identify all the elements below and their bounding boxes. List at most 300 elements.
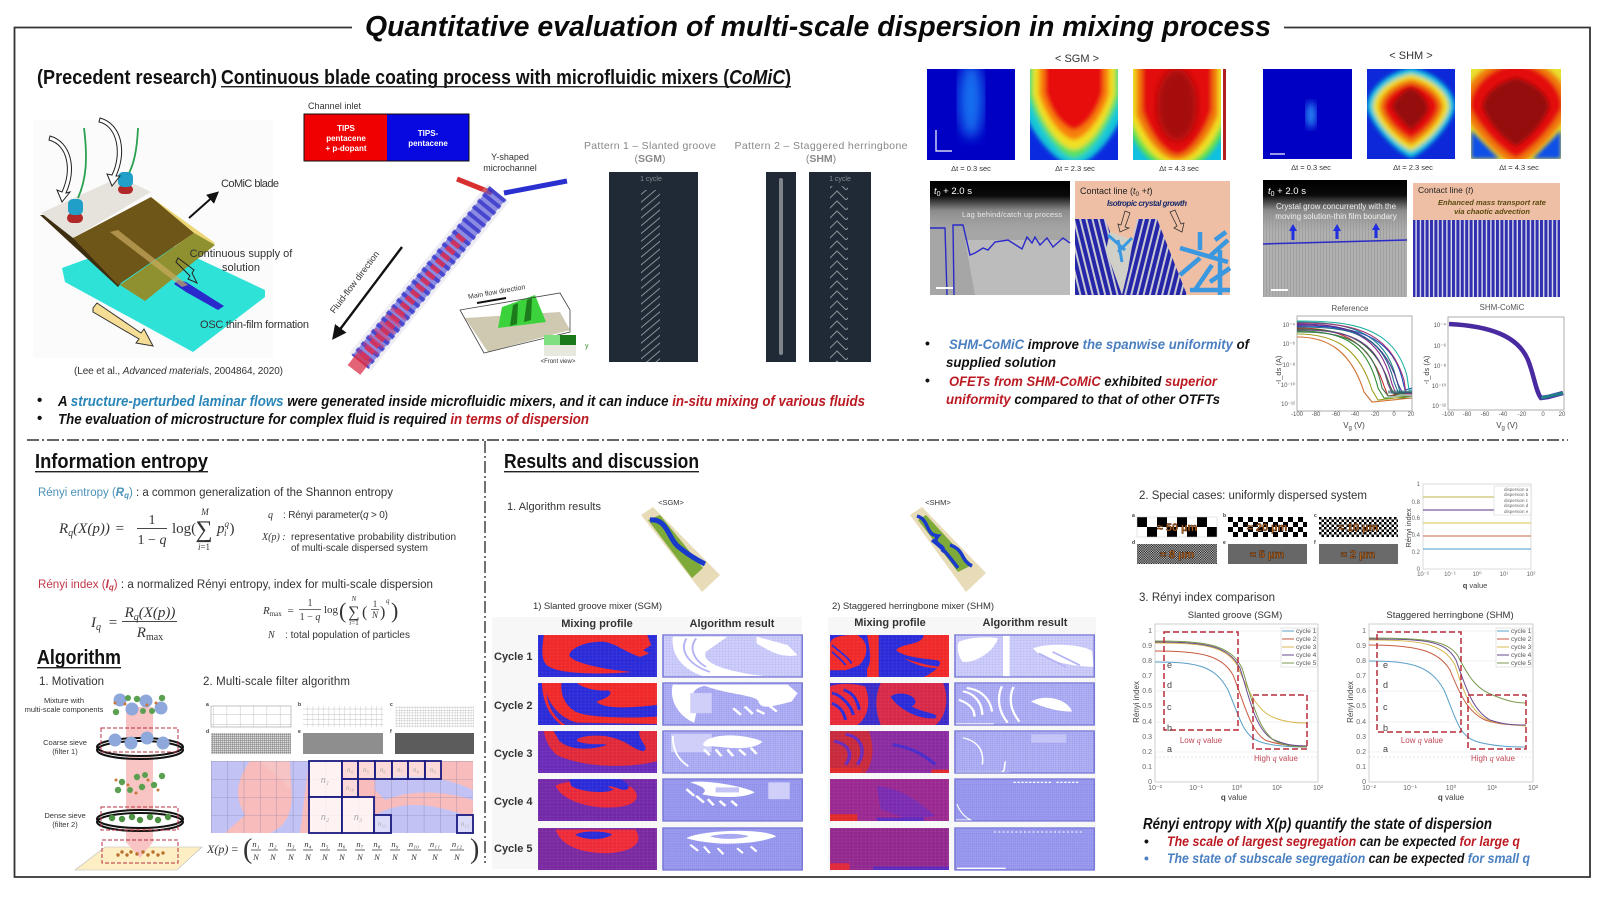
colorbar [1223,69,1226,160]
multi-scale grid with selected cells: n₉ [430,766,437,774]
heatmaps: SHM [1263,50,1570,172]
chart: SGM Renyi index: 10⁻² [1148,785,1163,792]
chart: SHM Renyi index: 0.2 [1356,749,1366,756]
key findings: left: A structure-perturbed laminar flows were generated inside microfluidic mixers, and it can induce in-situ mixing of various fluids [57,394,865,410]
parameter notes: q and X(p): representative probability distribution [291,532,456,543]
heading: algorithm: Algorithm [37,647,121,669]
patterns: (SHM) [806,153,836,165]
chart: SGM Renyi index: c [1167,702,1172,712]
algorithm result: SGM cycle 4 [663,779,802,821]
label: CoMiC blade: CoMiC blade [221,178,279,190]
chart: SHM Renyi index: 0.4 [1356,719,1366,726]
chart: SHM Renyi index: cycle 5 [1511,660,1532,667]
formula: Renyi index: R [125,605,134,621]
chart: uniform dispersion: 10⁻² [1417,572,1429,578]
heading: information entropy: Information entropy [35,451,209,473]
chart: reference transfer curves: 10⁻⁴ [1283,322,1295,329]
patterns: Pattern 2 – Staggered herringbone [734,140,908,152]
formula: X(p): N [338,852,346,862]
chart: reference transfer curves: -20 [1371,412,1380,418]
chart: reference transfer curves: 20 [1408,412,1415,418]
SEM: SGM: + 2.0 s [941,186,972,197]
heading: precedent research: (Precedent research) [37,67,217,89]
conclusion: Rényi entropy with X(p) quantify the state of dispersion [1143,816,1492,833]
table: slanted groove mixer [492,601,802,870]
time labels: SHM: Δt = 0.3 sec [1291,163,1331,172]
chart: SHM Renyi index: 10⁻² [1362,785,1377,792]
diagram: sieving motivation [25,694,202,870]
inset: groove box [460,284,589,365]
checkerboards: ≈ 5 µm [1250,549,1284,561]
definition: Renyi index: ) [114,579,118,591]
diagram: isotropic growth [1075,181,1230,295]
formula: Renyi index: = [105,615,117,631]
formula: X(p) [206,834,479,865]
checkerboards: ≈ 50 µm [1157,522,1197,534]
parameter notes: q and X(p): : Rényi parameter(q > 0) [283,510,388,521]
chart: SGM Renyi index: Low q value [1180,736,1222,745]
formula: X(p): X(p) = [206,842,238,856]
chart: SHM Renyi index: 0.1 [1356,764,1366,771]
formula: Renyi index: q [134,612,139,623]
chart: SHM Renyi index: e [1383,660,1388,670]
arrow: fluid-flow direction [335,247,402,336]
definition: Renyi index: : a normalized Rényi entropy, index for multi-scale dispersion [121,579,431,591]
mixing profile: SGM cycle 3 [538,731,657,773]
time labels: SGM: Δt = 0.3 sec [951,164,991,173]
chart: SGM Renyi index: High q value [1254,754,1298,763]
SEM: SHM [1263,180,1407,297]
chart: SHM-CoMiC transfer curves: -40 [1499,412,1508,418]
heatmap: SGM 0.3 s [927,62,1015,160]
chart: SHM-CoMiC transfer curves: -20 [1518,412,1527,418]
chart: SHM-CoMiC transfer curves: 10⁻⁸ [1434,363,1446,370]
chart: SHM Renyi index: q value [1438,793,1465,802]
row labels: Cycle 2 [494,700,533,712]
patterns: (SGM) [635,153,665,165]
chart: SGM Renyi index: 0.4 [1142,719,1152,726]
filter grids [206,702,474,754]
chart: SGM Renyi index: d [1167,680,1172,690]
key findings: right: supplied solution [946,354,1056,370]
algorithm result: SHM cycle 2 [955,683,1094,725]
label: OSC thin-film: OSC thin-film formation [200,319,309,331]
chart: SHM-CoMiC transfer curves: -60 [1481,412,1490,418]
panel: slanted groove pattern [609,172,698,362]
chart: SHM Renyi index: Rényi index [1346,681,1355,723]
chart: reference transfer curves: -80 [1312,412,1321,418]
formula: Renyi index: max [146,632,163,643]
algorithm result: SGM cycle 2 [663,683,802,725]
chart: uniform dispersion: dispersion a [1504,487,1529,492]
formula: R max: max [270,610,282,618]
parameter notes: q and X(p) [261,510,456,554]
chart: SHM Renyi index: a [1383,744,1388,754]
definition: Renyi entropy: ) [129,487,133,499]
panel: staggered herringbone pattern: 1 cycle [829,176,851,183]
multi-scale grid with selected cells: n₁₁ [378,820,386,828]
chart: SHM-CoMiC transfer curves: g [1502,426,1505,432]
chart: SGM Renyi index: 10² [1313,785,1324,792]
table: slanted groove mixer: Algorithm result [690,618,775,630]
SEM: SHM: + 2.0 s [1275,186,1306,197]
chart: SHM Renyi index: 0.3 [1356,734,1366,741]
SEM: SHM: 0 [1271,191,1275,198]
heatmap: SGM 2.3 s [1030,69,1118,160]
heatmap: SGM 4.3 s [1133,69,1221,160]
SEM: SGM: t [934,186,937,197]
formula: R max: 1 [373,599,377,609]
chart: SHM Renyi index: Staggered herringbone (SHM) [1386,610,1514,621]
mixer schematic: SGM [641,498,720,592]
conclusion: • [1144,833,1149,849]
chart: reference transfer curves: 10⁻⁸ [1283,362,1295,369]
chart: SHM-CoMiC transfer curves: -80 [1463,412,1472,418]
checkerboards: c [1314,513,1317,519]
formula: Renyi entropy: p [217,521,224,537]
formula: Renyi entropy: M [200,507,209,517]
parameter note: N: : total population of particles [285,630,410,641]
multi-scale grid with selected cells: n₁₀ [346,784,355,792]
definition: Renyi index: Rényi index (I [38,579,109,591]
chart: SGM Renyi index: 0.1 [1142,764,1152,771]
algorithm result: SHM cycle 5 [955,828,1094,870]
chart: SGM Renyi index: 10⁻¹ [1189,785,1204,792]
diagram: sieving motivation: Coarse sieve [43,738,87,747]
formula: X(p): N [373,852,381,862]
formula: R max: 1 [308,598,312,609]
conclusion: The scale of largest segregation can be expected for large q [1167,834,1521,849]
formula: X(p): n₄ [304,839,312,849]
microchannel: Y-shaped [491,152,529,162]
formula: Renyi entropy: 1 [148,513,156,528]
mixer schematic: SHM: <SHM> [925,498,951,507]
chart: reference transfer curves: 10⁻¹⁰ [1281,382,1296,389]
formula: X(p): N [391,852,399,862]
checkerboards: ≈ 20 µm [1247,522,1287,534]
chart: uniform dispersion [1404,482,1535,590]
panel: slanted groove pattern: 1 cycle [640,176,662,183]
chart: SGM Renyi index: 1 [1148,628,1152,635]
formula: R max: 1 − q [300,612,320,623]
mixer schematic: SGM: <SGM> [658,498,685,507]
diagram: sieving motivation: multi-scale components [25,705,104,714]
patterns [584,140,908,362]
mixing profile: SGM cycle 5 [538,828,657,870]
chart: SHM Renyi index [1346,610,1539,802]
conclusion: The state of subscale segregation can be expected for small q [1167,851,1531,866]
chart: uniform dispersion: 0.8 [1412,500,1421,506]
chart: SHM-CoMiC transfer curves: 10⁻¹⁰ [1432,383,1447,390]
multi-scale grid with selected cells: n₅ [363,766,370,774]
chart: SHM Renyi index: 10¹ [1487,785,1498,792]
formula: X(p): n₅ [321,839,329,849]
parameter notes: q and X(p): q [268,510,273,521]
subheading: algorithm results: 1. Algorithm results [507,501,602,513]
formula: Renyi entropy: ∑ [195,517,213,543]
formula: Renyi entropy: = [112,521,124,537]
key findings: left: • [37,410,42,427]
formula: R max: ∑ [348,604,360,621]
filter grids: b [298,702,301,708]
chart: SHM Renyi index: 0.5 [1356,703,1366,710]
chart: SGM Renyi index: cycle 3 [1296,644,1317,651]
heatmaps: SGM: < SGM > [1055,53,1099,65]
chart: SGM Renyi index: 10¹ [1272,785,1283,792]
key findings: left: • [37,392,42,409]
formula: Renyi entropy: log( [172,521,196,537]
chart: uniform dispersion: 10⁻¹ [1444,572,1456,578]
filter grids: a [206,702,209,708]
inset: groove box: <Front view> [541,359,576,365]
formula: X(p): N [356,852,364,862]
diagram: enhanced transport: via chaotic advection [1454,207,1530,216]
filter grids: e [298,729,301,735]
mixing profile: SHM cycle 1 [830,635,949,677]
chart: SHM Renyi index: 0.9 [1356,643,1366,650]
chart: SGM Renyi index: cycle 4 [1296,652,1317,659]
formula: Renyi entropy: (X(p)) [73,521,110,537]
chart: SHM Renyi index: 0.8 [1356,658,1366,665]
chart: SGM Renyi index: e [1167,660,1172,670]
chart: SHM-CoMiC transfer curves: V [1496,421,1502,430]
chart: SHM-CoMiC transfer curves: 20 [1559,412,1566,418]
formula: X(p): n₁ [252,839,260,849]
chart: SHM-CoMiC transfer curves [1422,303,1566,432]
chart: uniform dispersion: 10¹ [1500,572,1508,578]
chart: SHM Renyi index: cycle 2 [1511,636,1532,643]
time labels: SHM: Δt = 4.3 sec [1499,163,1539,172]
formula: X(p): N [410,852,418,862]
chart: SHM Renyi index: b [1383,723,1388,733]
title: Quantitative evaluation of multi-scale dispersion in mixing process [365,11,1271,43]
formula: R max: ( [362,604,367,621]
chart: SGM Renyi index: cycle 2 [1296,636,1317,643]
chart: SGM Renyi index: 0.6 [1142,688,1152,695]
key findings: right: OFETs from SHM-CoMiC exhibited superior [949,373,1218,389]
chart: SGM Renyi index: 0.8 [1142,658,1152,665]
diagram: isotropic growth: Contact line (t [1080,186,1136,196]
chart: reference transfer curves: g [1349,426,1352,432]
diagram: isotropic growth: + [1139,186,1147,196]
key findings: right: • [925,372,930,388]
key findings: left [37,392,865,428]
formula: X(p): n₆ [338,839,346,849]
SEM: SGM: Lag behind/catch up process [962,210,1062,219]
formula: Renyi entropy: q [68,528,73,539]
inset: groove box: y [585,343,589,350]
chart: uniform dispersion: 0.6 [1412,516,1421,522]
formula: Renyi entropy: ) [230,521,235,537]
formula: Renyi entropy: q [224,519,230,529]
chart: uniform dispersion: dispersion b [1504,492,1529,497]
multi-scale grid with selected cells: n₆ [380,766,387,774]
table: staggered herringbone mixer: Mixing profile [854,617,926,629]
subheading: filter algorithm: 2. Multi-scale filter algorithm [203,676,350,688]
formula: X(p): ) [470,834,479,865]
multi-scale grid with selected cells: n₇ [397,766,404,774]
checkerboards: d [1132,540,1135,546]
chart: SGM Renyi index: cycle 5 [1296,660,1317,667]
chart: SGM Renyi index: 0.5 [1142,703,1152,710]
chart: SHM Renyi index: cycle 3 [1511,644,1532,651]
algorithm result: SHM cycle 4 [955,779,1094,821]
conclusion [1143,816,1531,866]
formula: X(p): N [431,852,439,862]
chart: SHM Renyi index: 0.7 [1356,673,1366,680]
formula: X(p): N [321,852,329,862]
heatmap: SHM 2.3 s [1367,68,1455,159]
subheading: index comparison: 3. Rényi index comparison [1139,592,1275,604]
chart: SGM Renyi index: Rényi index [1132,681,1141,723]
row labels: Cycle 5 [494,843,533,855]
formula: X(p): n₇ [356,839,364,849]
chart: uniform dispersion: 1 [1417,482,1421,488]
chart: SHM Renyi index: c [1383,702,1388,712]
checkerboards: b [1223,513,1226,519]
SEM: SGM [930,181,1070,295]
chart: SGM Renyi index: q value [1221,793,1248,802]
formula: X(p): n₁₀ [409,839,419,849]
channel inlet: pentacene [408,139,448,148]
chart: SGM Renyi index: 10⁰ [1232,784,1242,792]
chart: reference transfer curves: -60 [1332,412,1341,418]
chart: uniform dispersion: dispersion c [1504,498,1529,503]
chart: SHM Renyi index: d [1383,680,1388,690]
checkerboards: e [1223,540,1226,546]
SEM: SHM: Crystal grow concurrently with the [1276,202,1396,211]
SEM: SGM: 0 [937,191,941,198]
heatmap: SHM 4.3 s [1471,69,1561,159]
mixing profile: SHM cycle 5 [830,828,949,870]
chart: SHM-CoMiC transfer curves: -100 [1442,412,1455,418]
chart: reference transfer curves: Reference [1332,304,1369,313]
table: slanted groove mixer: Mixing profile [561,618,633,630]
chart: SHM Renyi index: 0 [1362,779,1366,786]
formula: X(p): N [304,852,312,862]
algorithm result: SGM cycle 5 [663,828,802,870]
algorithm result: SHM cycle 3 [955,731,1094,773]
chart: SGM Renyi index: b [1167,723,1172,733]
mixing profile: SGM cycle 4 [538,779,657,821]
heatmaps: SHM: < SHM > [1389,50,1433,62]
conclusion: • [1144,850,1149,866]
time labels: SGM: Δt = 2.3 sec [1055,164,1095,173]
multi-scale grid with selected cells: n₄ [347,766,354,774]
chart: SHM-CoMiC transfer curves: -I_ds (A) [1422,355,1431,384]
chart: SGM Renyi index: 0.2 [1142,749,1152,756]
subheading: special cases: 2. Special cases: uniformly dispersed system [1139,490,1367,502]
algorithm result: SGM cycle 1 [663,635,802,677]
diagram: CoMiC blade [33,118,309,358]
formula: X(p): n₃ [287,839,295,849]
formula: Renyi entropy: R [59,521,68,537]
chart: reference transfer curves: (V) [1352,421,1365,430]
formula: R max: i=1 [349,619,359,627]
chart: SHM-CoMiC transfer curves: 0 [1541,412,1545,418]
heatmaps: SGM [927,53,1229,173]
formula: X(p): n₁₂ [452,839,462,849]
diagram: sieving motivation: (filter 2) [52,820,78,829]
checkerboards: ≈ 2 µm [1341,549,1375,561]
panel: staggered herringbone pattern [766,172,871,362]
inset: groove box: Main flow direction [468,284,526,301]
formula: Renyi entropy: i [224,528,227,538]
panel: results and discussion [492,451,1539,870]
diagram: sieving motivation: (filter 1) [52,747,78,756]
formula: R max: ( [339,598,346,623]
chart: reference transfer curves: 0 [1392,412,1396,418]
formula: X(p): ( [243,834,252,865]
multi-scale grid with selected cells: n₈ [413,766,420,774]
chart: uniform dispersion: 10² [1527,572,1535,578]
checkerboards: ≈ 8 µm [1160,549,1194,561]
chart: SHM Renyi index: High q value [1471,754,1515,763]
chart: SHM-CoMiC transfer curves: (V) [1505,421,1518,430]
row labels: Cycle 3 [494,748,533,760]
chart: SGM Renyi index: 0.3 [1142,734,1152,741]
chart: SGM Renyi index: a [1167,744,1172,754]
chart: reference transfer curves: -I_ds (A) [1274,355,1283,384]
filter grids: d [206,729,209,735]
channel inlet: TIPS [337,124,355,133]
multi-scale grid with selected cells: n₃ [354,812,363,823]
formula: X(p): n₂ [269,839,277,849]
chart: reference transfer curves: 10⁻⁶ [1283,341,1296,348]
chart: uniform dispersion: q value [1463,581,1487,590]
definition: Renyi entropy: Rényi entropy (R [38,487,124,499]
panel: information entropy [35,451,456,643]
formula: R max: log [324,604,339,616]
diagram: isotropic growth: 0 [1136,191,1140,198]
diagram: enhanced transport: Contact line (t) [1418,185,1473,195]
multi-scale grid with selected cells [211,761,473,833]
formula: X(p): n₁₁ [430,839,440,849]
row labels: Cycle 1 [494,651,533,663]
algorithm result: SGM cycle 3 [663,731,802,773]
chart: uniform dispersion: 0.4 [1412,533,1421,539]
heading: precedent research: Continuous blade coating process with microfluidic mixers (CoMiC) [221,67,791,89]
multi-scale grid with selected cells: n₁₂ [461,820,470,828]
formula: R max: N [351,595,357,603]
mixer schematic: SHM [910,498,986,592]
parameter notes: q and X(p): of multi-scale dispersed system [291,543,428,554]
definition: Renyi entropy: q [124,491,129,500]
formula: R max: ) [391,598,398,623]
label: continuous supply: solution [222,262,260,274]
mixing profile: SHM cycle 2 [830,683,949,725]
chart: SGM Renyi index: cycle 1 [1296,628,1317,635]
channel inlet: + p-dopant [325,144,367,153]
chart: SHM Renyi index: 1 [1362,628,1366,635]
formula: Renyi index: I [91,615,96,631]
definition: Renyi entropy: : a common generalization of the Shannon entropy [136,487,394,499]
mixing profile: SGM cycle 1 [538,635,657,677]
SEM: SHM: moving solution-thin film boundary [1275,212,1397,221]
key findings: right: SHM-CoMiC improve the spanwise uniformity of [949,336,1250,352]
panel: algorithm [25,647,479,870]
table: slanted groove mixer: 1) Slanted groove mixer (SGM) [533,601,662,612]
formula: X(p): N [269,852,277,862]
time labels: SHM: Δt = 2.3 sec [1393,163,1433,172]
channel inlet: pentacene [326,134,366,143]
chart: SGM Renyi index: 0 [1148,779,1152,786]
mixing profile: SHM cycle 4 [830,779,949,821]
formula: X(p): N [287,852,295,862]
formula: X(p): n₈ [373,839,381,849]
formula: Renyi index: (X(p)) [139,605,175,621]
diagram: isotropic growth: Isotropic crystal growth [1107,199,1187,208]
